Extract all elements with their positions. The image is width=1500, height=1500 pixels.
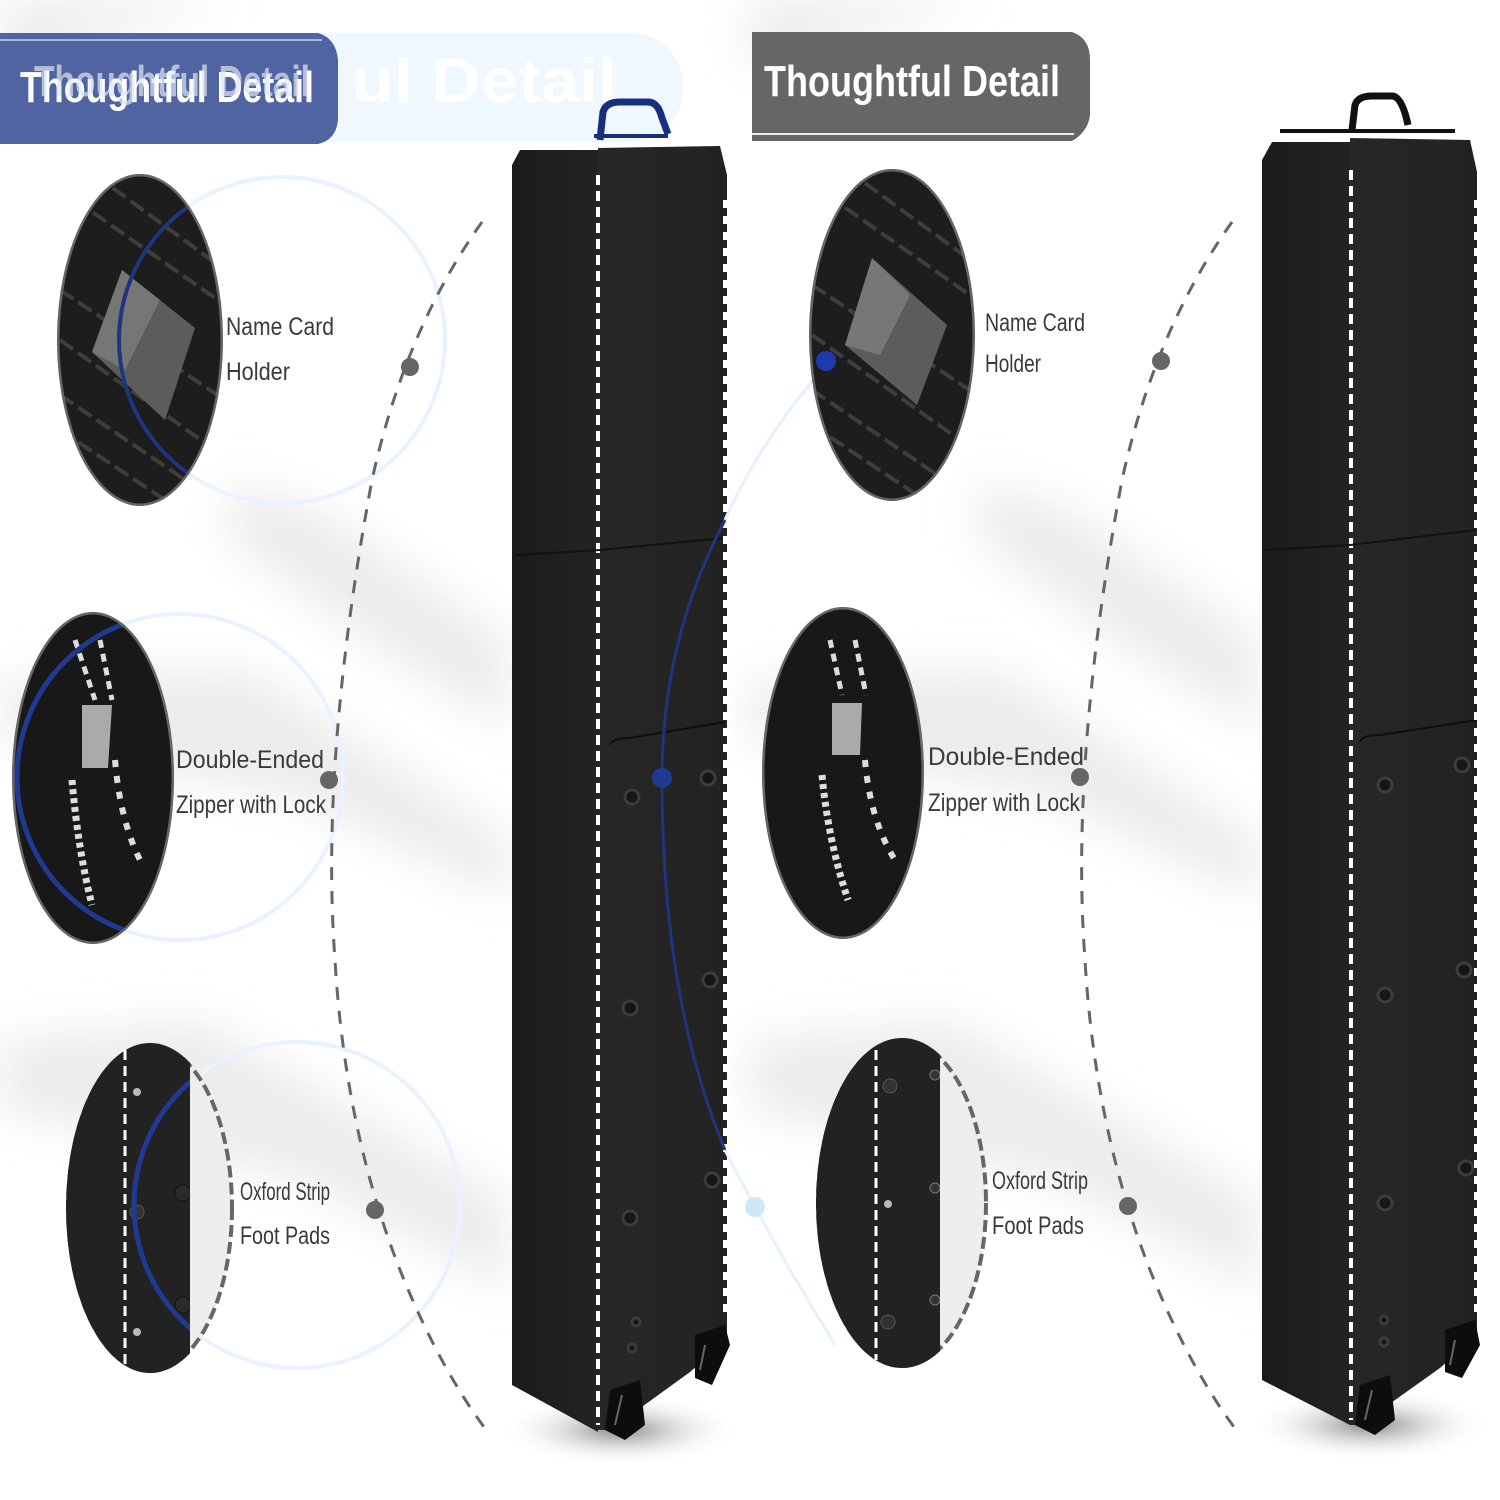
detail lens: zipper lock xyxy=(762,607,924,939)
detail lens: card holder xyxy=(809,169,977,505)
title banner: blue label xyxy=(0,33,338,144)
title banner: blue label: Thoughtful Detail xyxy=(20,63,314,112)
rivets xyxy=(1378,758,1473,1346)
callout circle outlines xyxy=(17,177,460,1368)
blue handle xyxy=(594,102,668,140)
wheels xyxy=(605,1325,730,1440)
guide dot: bottom xyxy=(1119,1197,1137,1215)
travel case xyxy=(1262,138,1480,1435)
title banner: pale pill with white text xyxy=(200,33,683,142)
label: zipper: Zipper with Lock xyxy=(176,791,326,819)
guide dot: middle xyxy=(320,771,338,789)
rivets xyxy=(623,771,719,1352)
label: card holder: Name Card xyxy=(985,309,1085,337)
arc dot: navy xyxy=(652,768,672,788)
dashed guide curve xyxy=(332,222,490,1435)
left panel: blue version xyxy=(0,33,835,1466)
label: foot pads: Oxford Strip xyxy=(992,1167,1088,1195)
label: foot pads: Oxford Strip xyxy=(240,1178,330,1206)
label: zipper: Zipper with Lock xyxy=(928,789,1080,817)
marker dot: navy xyxy=(816,351,836,371)
label: card holder: Name Card xyxy=(226,313,334,341)
label: foot pads: Foot Pads xyxy=(992,1212,1084,1240)
right panel: grey version xyxy=(752,32,1490,1461)
title banner: blue label: Thoughtful Detail xyxy=(34,57,310,106)
guide dot: top xyxy=(401,358,419,376)
label: zipper: Double-Ended xyxy=(176,746,324,774)
shadow under case xyxy=(500,1394,740,1466)
guide dot: middle xyxy=(1071,768,1089,786)
label: foot pads: Foot Pads xyxy=(240,1222,330,1250)
detail lens: zipper lock xyxy=(12,612,174,944)
detail lens: foot pads xyxy=(816,1038,988,1368)
guide dot: top xyxy=(1152,352,1170,370)
detail lens: foot pads xyxy=(66,1043,234,1373)
wheels xyxy=(1355,1320,1480,1435)
label: card holder: Holder xyxy=(226,358,290,386)
title banner: grey label xyxy=(752,32,1090,141)
label: card holder: Holder xyxy=(985,350,1041,378)
navy and pale arc across the case xyxy=(662,360,835,1345)
guide dot: bottom xyxy=(366,1201,384,1219)
shadow under case xyxy=(1250,1389,1490,1461)
black handle xyxy=(1280,96,1455,131)
detail lens: card holder xyxy=(57,174,223,506)
label: zipper: Double-Ended xyxy=(928,743,1084,771)
dashed guide curve xyxy=(1082,222,1240,1435)
title banner: pale pill with white text: ul Detail xyxy=(352,47,617,116)
title banner: grey label: Thoughtful Detail xyxy=(764,57,1060,106)
travel case xyxy=(512,146,730,1440)
arc dot: pale xyxy=(745,1197,765,1217)
